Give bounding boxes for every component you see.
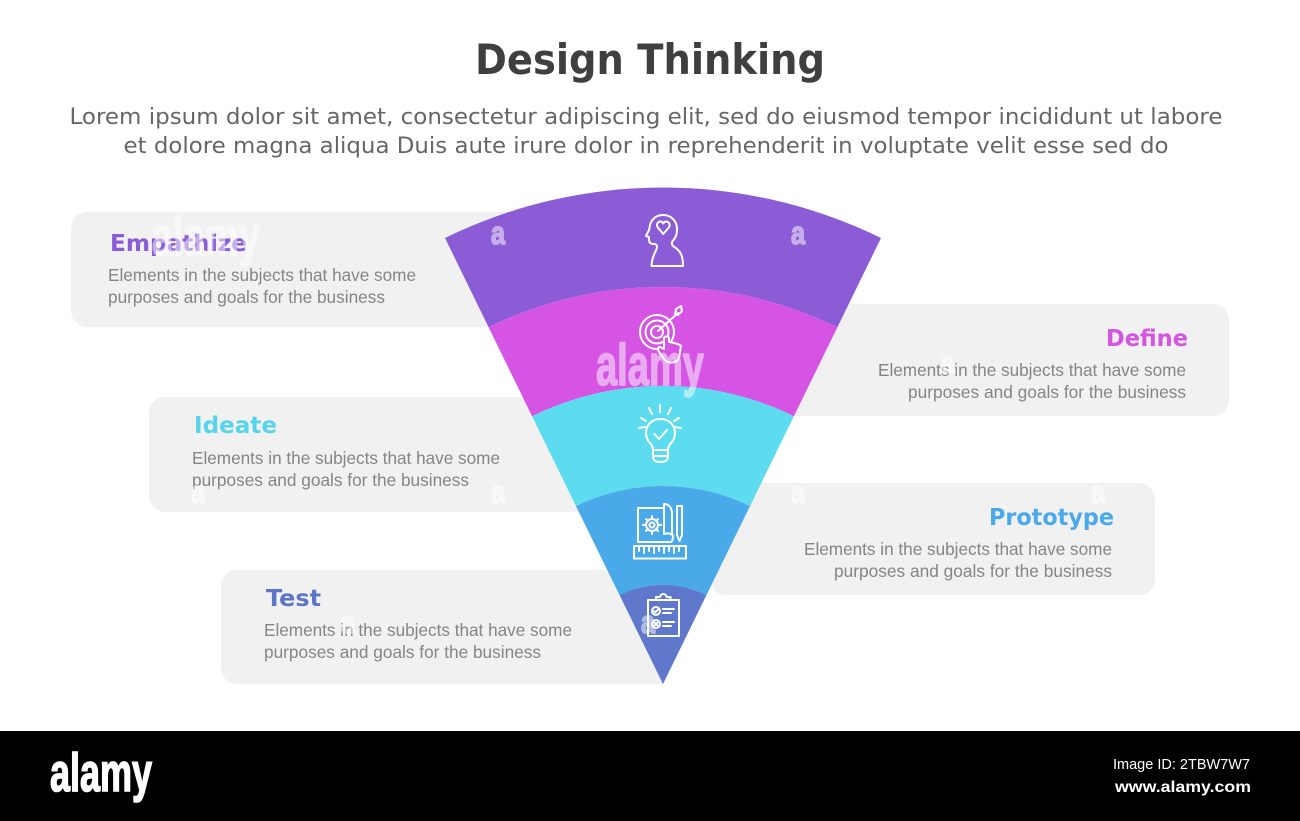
footer logo: alamy xyxy=(50,743,152,803)
icon: clipboard checklist xyxy=(648,594,679,636)
segment: Prototype xyxy=(576,486,750,595)
description: Test: purposes and goals for the business xyxy=(264,642,541,662)
icon: head with heart xyxy=(646,215,683,266)
segment: Define xyxy=(489,287,837,416)
heading: Ideate: Ideate xyxy=(194,413,277,439)
footer bar xyxy=(0,731,1300,821)
panel: Test xyxy=(221,570,663,684)
watermark: alamy xyxy=(152,207,260,267)
watermark: a xyxy=(191,474,205,510)
watermark: a xyxy=(791,215,805,251)
panel: Prototype xyxy=(710,483,1155,595)
watermark: a xyxy=(491,474,505,510)
description: Empathize xyxy=(108,265,416,307)
heading: Test: Test xyxy=(266,586,321,612)
image id: Image ID: 2TBW7W7 xyxy=(1113,756,1250,773)
watermark xyxy=(152,207,1105,640)
subtitle: et dolore magna aliqua Duis aute irure dolor in reprehenderit in voluptate velit esse sed do xyxy=(124,133,1168,159)
funnel fan chart xyxy=(445,188,881,684)
title: Design Thinking xyxy=(475,35,825,84)
description: Test: Elements in the subjects that have some xyxy=(264,620,572,640)
panel: Empathize xyxy=(71,212,531,327)
description: Define: Elements in the subjects that have some xyxy=(878,360,1186,380)
segment: Ideate xyxy=(532,386,794,506)
description: Prototype: purposes and goals for the business xyxy=(834,561,1112,581)
icon: light bulb with check xyxy=(639,405,681,462)
heading: Empathize: Empathize xyxy=(110,231,247,257)
description: Define xyxy=(878,360,1186,402)
description: Empathize: purposes and goals for the business xyxy=(108,287,385,307)
subtitle xyxy=(70,104,1222,159)
watermark: a xyxy=(641,604,655,640)
segment: Test xyxy=(620,585,706,684)
watermark: a xyxy=(941,344,955,380)
watermark: a xyxy=(791,474,805,510)
description: Empathize: Elements in the subjects that have some xyxy=(108,265,416,285)
description: Define: purposes and goals for the business xyxy=(908,382,1186,402)
watermark: a xyxy=(341,604,355,640)
panel: Define xyxy=(780,304,1229,416)
icon: target with arrow and hand xyxy=(640,306,682,362)
description: Prototype xyxy=(804,539,1112,581)
description: Ideate: purposes and goals for the business xyxy=(192,470,469,490)
description: Prototype: Elements in the subjects that have some xyxy=(804,539,1112,559)
subtitle: Lorem ipsum dolor sit amet, consectetur adipiscing elit, sed do eiusmod tempor incididunt ut labore xyxy=(70,104,1222,130)
heading: Prototype: Prototype xyxy=(989,505,1114,531)
description: Ideate xyxy=(192,448,500,490)
watermark: alamy xyxy=(596,333,704,398)
watermark: a xyxy=(1091,474,1105,510)
heading: Define: Define xyxy=(1106,326,1188,352)
watermark: a xyxy=(491,215,505,251)
segment: Empathize xyxy=(445,188,881,327)
description: Test xyxy=(264,620,572,662)
description: Ideate: Elements in the subjects that have some xyxy=(192,448,500,468)
website: www.alamy.com xyxy=(1114,779,1251,796)
panel: Ideate xyxy=(149,397,589,512)
icon: blueprint, gear, ruler, pencil xyxy=(634,504,686,558)
